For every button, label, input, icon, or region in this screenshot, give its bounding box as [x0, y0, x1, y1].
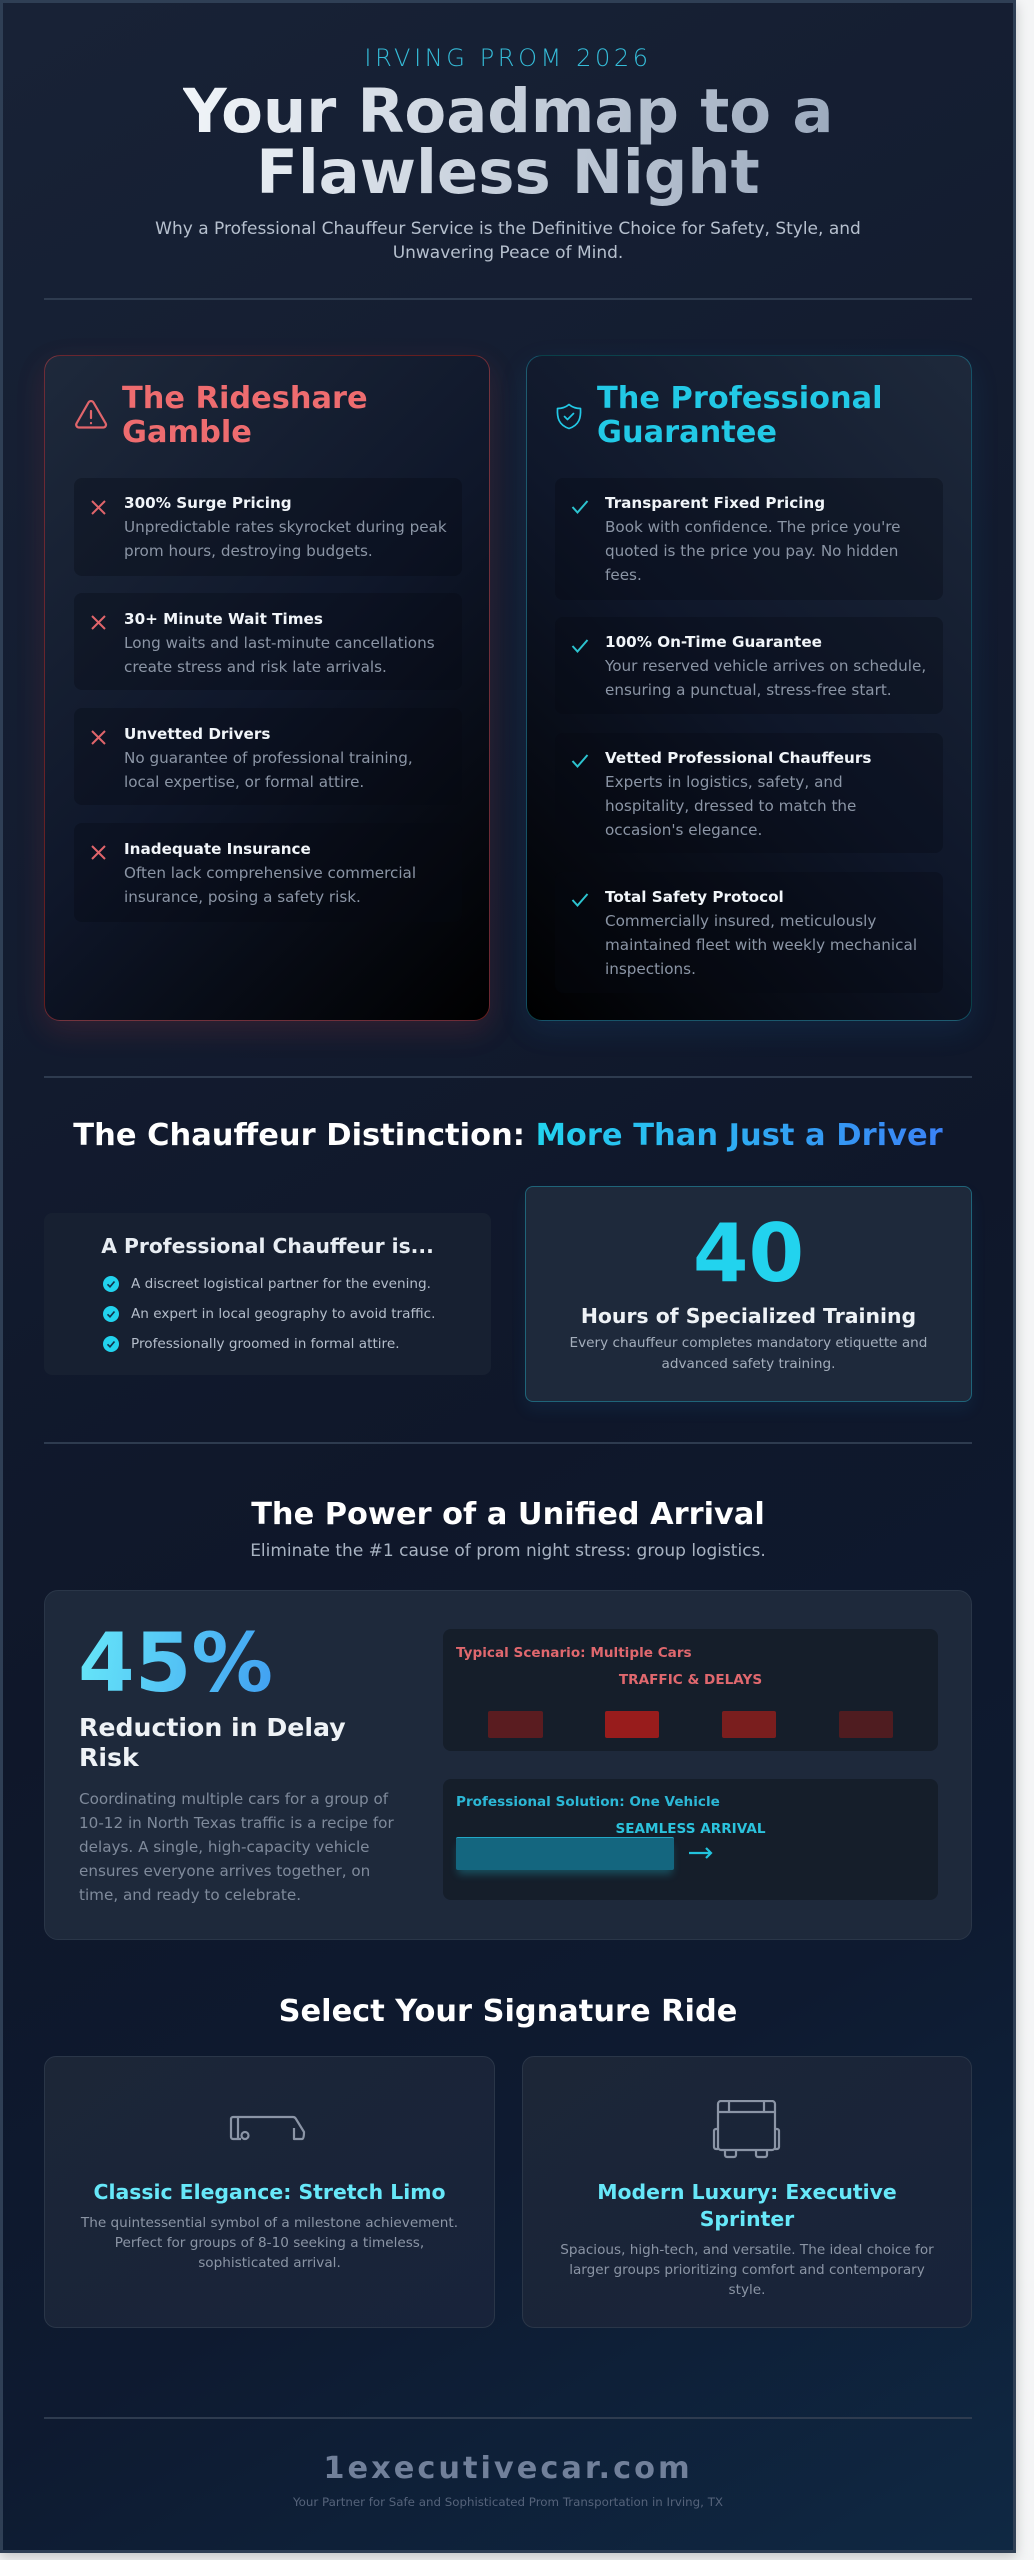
stat description — [79, 1790, 394, 1904]
stat label: Risk — [79, 1743, 139, 1772]
text: vetted chauffeurs: Vetted Professional Chauffeurs — [605, 748, 871, 766]
list item: A discreet logistical partner for the evening. — [131, 1276, 431, 1292]
card text: Spacious, high-tech, and versatile. The ideal choice for — [560, 2242, 934, 2258]
item: safety protocol — [555, 872, 943, 993]
bar: single vehicle — [456, 1837, 674, 1870]
icon: check — [572, 893, 588, 907]
icon: cross — [91, 730, 106, 745]
text: insurance: insurance, posing a safety risk. — [124, 888, 361, 906]
text: surge pricing: prom hours, destroying budgets. — [124, 542, 373, 560]
text: vetted chauffeurs: Experts in logistics, safety, and — [605, 772, 843, 790]
stat description: Coordinating multiple cars for a group of — [79, 1790, 388, 1808]
footer: domain: 1executivecar.com — [323, 2451, 693, 2486]
label: traffic: TRAFFIC & DELAYS — [619, 1672, 762, 1688]
icon: sprinter — [712, 2100, 780, 2158]
heading: signature ride: Select Your Signature Ride — [279, 1994, 737, 2029]
item: insurance — [74, 823, 462, 922]
subheading: Eliminate the #1 cause of prom night stress: group logistics. — [250, 1541, 766, 1561]
subtitle: Why a Professional Chauffeur Service is the Definitive Choice for Safety, Style, and — [155, 219, 861, 239]
text: vetted chauffeurs: hospitality, dressed to match the — [605, 796, 856, 814]
cars — [488, 1711, 893, 1738]
heading: professional: Guarantee — [597, 415, 777, 450]
icon: check — [572, 639, 588, 653]
stat description: delays. A single, high-capacity vehicle — [79, 1838, 370, 1856]
heading: professional — [597, 381, 883, 450]
list item: Professionally groomed in formal attire. — [131, 1336, 400, 1352]
text: insurance: Inadequate Insurance — [124, 840, 311, 858]
text: fixed pricing: fees. — [605, 566, 642, 584]
panel: multiple cars scenario — [443, 1629, 938, 1751]
text: insurance: Often lack comprehensive commercial — [124, 864, 416, 882]
panel: unified arrival — [44, 1590, 972, 1940]
text: safety protocol — [605, 888, 917, 978]
text: unvetted drivers: No guarantee of professional training, — [124, 749, 413, 767]
text: fixed pricing: Book with confidence. The price you're — [605, 518, 901, 536]
stat description: Every chauffeur completes mandatory etiquette and — [570, 1335, 927, 1351]
heading: professional: The Professional — [597, 381, 883, 416]
text: unvetted drivers: local expertise, or formal attire. — [124, 773, 364, 791]
text: vetted chauffeurs: occasion's elegance. — [605, 820, 762, 838]
card heading: Sprinter — [700, 2206, 794, 2230]
stat label — [79, 1713, 346, 1772]
text: safety protocol: Commercially insured, meticulously — [605, 912, 876, 930]
text: wait times — [124, 610, 435, 676]
subtitle: Unwavering Peace of Mind. — [393, 243, 623, 263]
text: on-time: 100% On-Time Guarantee — [605, 633, 822, 651]
text: wait times: create stress and risk late arrivals. — [124, 658, 387, 676]
icon: cross — [91, 500, 106, 515]
label: typical scenario: Typical Scenario: Multiple Cars — [456, 1645, 692, 1661]
text: fixed pricing — [605, 494, 901, 584]
heading: rideshare: The Rideshare — [122, 381, 368, 416]
title: Your Roadmap to a — [183, 76, 833, 147]
icon: cross — [91, 845, 106, 860]
icon: check circle — [103, 1276, 119, 1292]
heading: chauffeur distinction: The Chauffeur Distinction: More Than Just a Driver — [73, 1118, 943, 1153]
card heading: Classic Elegance: Stretch Limo — [94, 2180, 445, 2204]
panel: rideshare gamble — [44, 355, 490, 1021]
label: seamless: SEAMLESS ARRIVAL — [615, 1821, 766, 1837]
stat number: 40 — [693, 1207, 804, 1300]
item: unvetted drivers — [74, 708, 462, 805]
label: professional solution: Professional Solution: One Vehicle — [456, 1794, 720, 1810]
text: surge pricing: 300% Surge Pricing — [124, 494, 292, 512]
stat description — [570, 1335, 927, 1372]
card text: larger groups prioritizing comfort and contemporary — [569, 2262, 925, 2278]
icon: check — [572, 500, 588, 514]
arrow — [689, 1847, 712, 1859]
text: safety protocol: inspections. — [605, 960, 696, 978]
card text: Perfect for groups of 8-10 seeking a timeless, — [115, 2235, 424, 2251]
text: safety protocol: maintained fleet with weekly mechanical — [605, 936, 917, 954]
stat label: Hours of Specialized Training — [581, 1304, 916, 1328]
text: unvetted drivers: Unvetted Drivers — [124, 725, 270, 743]
text: fixed pricing: Transparent Fixed Pricing — [605, 494, 825, 512]
list item: An expert in local geography to avoid traffic. — [131, 1306, 435, 1322]
stat description: ensures everyone arrives together, on — [79, 1862, 370, 1880]
card text: sophisticated arrival. — [198, 2255, 341, 2271]
footer: tagline: Your Partner for Safe and Sophisticated Prom Transportation in Irving, TX — [293, 2495, 723, 2509]
card: sprinter — [522, 2056, 972, 2328]
icon: cross — [91, 615, 106, 630]
text: on-time — [605, 633, 926, 699]
text: safety protocol: Total Safety Protocol — [605, 888, 784, 906]
stat: 45%: 45% — [78, 1616, 273, 1711]
subtitle — [155, 219, 861, 263]
stat label: Reduction in Delay — [79, 1713, 346, 1742]
item: on-time — [555, 617, 943, 714]
icon: limo — [230, 2116, 306, 2140]
heading: unified arrival: The Power of a Unified Arrival — [251, 1497, 765, 1532]
card heading — [597, 2180, 897, 2230]
item: surge pricing — [74, 478, 462, 576]
text: fixed pricing: quoted is the price you pay. No hidden — [605, 542, 898, 560]
panel: professional guarantee — [526, 355, 972, 1021]
stat description: advanced safety training. — [662, 1356, 835, 1372]
heading: rideshare — [122, 381, 368, 450]
text: surge pricing — [124, 494, 447, 560]
card: stretch limo — [44, 2056, 495, 2328]
text: on-time: ensuring a punctual, stress-free start. — [605, 681, 892, 699]
icon: check circle — [103, 1336, 119, 1352]
text: insurance — [124, 840, 416, 906]
text: wait times: Long waits and last-minute cancellations — [124, 634, 435, 652]
card text: style. — [729, 2282, 765, 2298]
eyebrow: IRVING PROM 2026 — [364, 44, 652, 72]
stat description: time, and ready to celebrate. — [79, 1886, 301, 1904]
card text: The quintessential symbol of a milestone achievement. — [81, 2214, 458, 2230]
icon: shield check — [556, 404, 582, 430]
text: wait times: 30+ Minute Wait Times — [124, 610, 323, 628]
heading: chauffeur is: A Professional Chauffeur is... — [101, 1234, 434, 1258]
stat description: 10-12 in North Texas traffic is a recipe for — [79, 1814, 394, 1832]
item: vetted chauffeurs — [555, 733, 943, 853]
text: on-time: Your reserved vehicle arrives on schedule, — [605, 657, 926, 675]
item: fixed pricing — [555, 478, 943, 600]
text: unvetted drivers — [124, 725, 413, 791]
card text — [560, 2242, 934, 2298]
heading: rideshare: Gamble — [122, 415, 252, 450]
text: vetted chauffeurs — [605, 748, 871, 838]
card heading: Modern Luxury: Executive — [597, 2180, 897, 2204]
panel: professional chauffeur list — [44, 1213, 491, 1375]
text: surge pricing: Unpredictable rates skyrocket during peak — [124, 518, 447, 536]
panel: 40 hours stat — [525, 1186, 972, 1402]
card text — [80, 2214, 458, 2271]
icon: warning triangle — [75, 400, 108, 429]
title — [183, 76, 833, 208]
icon: check — [572, 754, 588, 768]
title: Flawless Night — [256, 137, 760, 208]
icon: check circle — [103, 1306, 119, 1322]
panel: one vehicle solution — [443, 1779, 938, 1900]
item: wait times — [74, 593, 462, 690]
